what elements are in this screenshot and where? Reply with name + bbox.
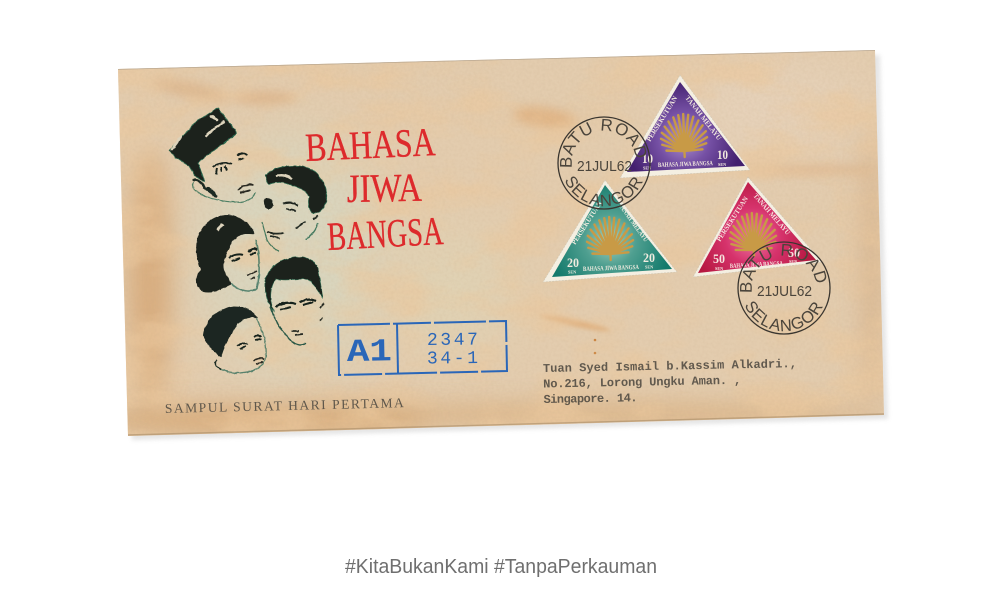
- envelope: [118, 50, 884, 436]
- stamp: purple 10 sen: TANAH MELAYU: [683, 94, 723, 142]
- registration box: 34-1: [427, 349, 478, 369]
- stamp: purple 10 sen: BAHASA JIWA BANGSA: [658, 160, 713, 169]
- stamp: red 50 sen: [693, 177, 822, 277]
- stamp: purple 10 sen: SEN: [643, 166, 651, 170]
- stamp: teal 20 sen: SEN: [645, 264, 653, 270]
- postmark: Batu Road top: [557, 116, 651, 210]
- title: Bahasa Jiwa Bangsa: BANGSA: [326, 208, 444, 259]
- title: Bahasa Jiwa Bangsa: BAHASA: [304, 119, 436, 170]
- paper base: [100, 40, 900, 450]
- stamp: purple 10 sen: [620, 75, 750, 178]
- paper ageing stains: [118, 52, 884, 436]
- address block: No.216, Lorong Ungku Aman. ,: [543, 374, 741, 391]
- registration box: A1: [347, 333, 392, 371]
- address block: [543, 357, 798, 407]
- envelope shadow: [122, 55, 888, 440]
- stamp: teal 20 sen: SEN: [568, 270, 576, 274]
- postmark: Batu Road top: 21JUL62: [577, 159, 632, 175]
- stamp: red 50 sen: PERSEKUTUAN: [715, 195, 750, 243]
- registration box: [338, 321, 507, 375]
- stamp: red 50 sen: SEN: [715, 266, 723, 271]
- face: woman with bun: [196, 215, 259, 293]
- infographic canvas: [118, 50, 889, 577]
- caption: Sampul Surat Hari Pertama: SAMPUL SURAT HARI PERTAMA: [165, 395, 404, 416]
- stamp: red 50 sen: BAHASA JIWA BANGSA: [730, 260, 783, 270]
- postmark: Batu Road bottom: SELANGOR: [746, 302, 823, 332]
- registration box: 2347: [427, 331, 478, 351]
- address block: Tuan Syed Ismail b.Kassim Alkadri.,: [543, 357, 797, 376]
- stamp: red 50 sen: 50: [713, 252, 725, 266]
- illustration: five faces: [169, 108, 327, 373]
- face: young man lower right: [265, 257, 324, 345]
- postmark: Batu Road top: BATU ROAD: [560, 118, 646, 167]
- stamp: teal 20 sen: 20: [567, 256, 579, 270]
- face: young man top right: [262, 166, 327, 251]
- face: man with songkok: [169, 108, 255, 202]
- hashtags footer: #KitaBukanKami #TanpaPerkauman: [345, 556, 657, 578]
- stamp: red 50 sen: TANAH MELAYU: [751, 192, 792, 237]
- postmark: Batu Road top: SELANGOR: [566, 176, 643, 206]
- stamp: purple 10 sen: PERSEKUTUAN: [645, 95, 679, 143]
- title: Bahasa Jiwa Bangsa: JIWA: [346, 165, 422, 211]
- stamp: teal 20 sen: PERSEKUTUAN: [570, 200, 604, 246]
- stamp: red 50 sen: SEN: [789, 259, 797, 264]
- stamp: red 50 sen: 50: [788, 246, 800, 260]
- title: Bahasa Jiwa Bangsa: [304, 119, 444, 259]
- postmark: Batu Road bottom: BATU ROAD: [740, 244, 826, 292]
- address block: Singapore. 14.: [543, 391, 638, 407]
- stamp: teal 20 sen: [543, 180, 677, 282]
- postmark: Batu Road bottom: 21JUL62: [757, 284, 812, 300]
- stamp: purple 10 sen: 10: [717, 148, 728, 162]
- stamp: teal 20 sen: TANAH MELAYU: [616, 201, 650, 243]
- postmark: Batu Road bottom: [737, 241, 831, 335]
- stamp: purple 10 sen: 10: [642, 152, 653, 166]
- face: girl bottom: [203, 306, 266, 373]
- stamp: teal 20 sen: 20: [643, 251, 655, 265]
- stamp: teal 20 sen: BAHASA JIWA BANGSA: [583, 264, 639, 273]
- stamp: purple 10 sen: SEN: [718, 162, 726, 167]
- envelope edge shading: [128, 414, 884, 435]
